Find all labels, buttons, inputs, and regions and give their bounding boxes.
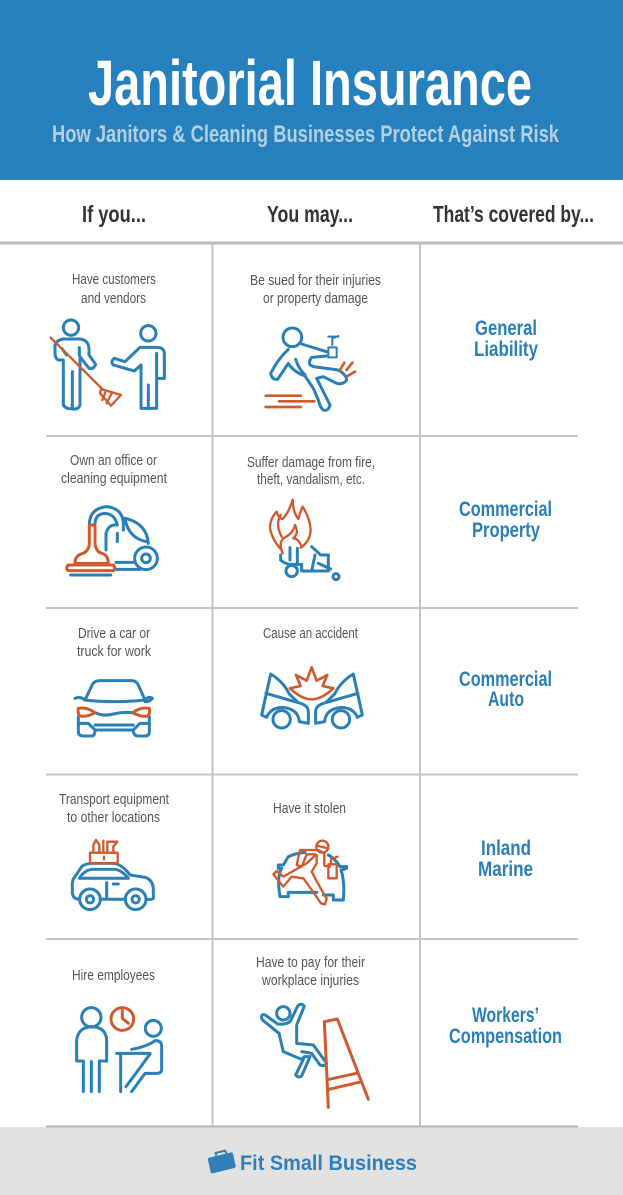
coverage: general liability: General (475, 317, 537, 340)
header banner (0, 0, 623, 180)
text: have it stolen: Have it stolen (273, 800, 346, 817)
text: have to pay: Have to pay for their (256, 954, 365, 971)
coverage: commercial property: Property (472, 519, 540, 542)
coverage: general liability (474, 317, 538, 361)
text: drive a car: Drive a car or (78, 625, 150, 642)
text: have customers: Have customers (72, 271, 156, 288)
coverage: general liability: Liability (474, 338, 538, 361)
text: have to pay (256, 954, 365, 989)
text: own an office: Own an office or (70, 452, 157, 469)
row 2: office or equipment (61, 452, 552, 580)
coverage: inland marine (478, 837, 533, 881)
icon: vacuum cleaner (67, 507, 157, 575)
text: have customers: and vendors (81, 290, 146, 307)
icon: janitor with broom and customer (51, 320, 164, 409)
icon: thief running past car (273, 841, 347, 904)
row 1: customers and vendors (51, 271, 538, 410)
coverage: workers compensation: Workers’ (472, 1004, 539, 1027)
icon: fire on cleaning cart (270, 500, 339, 580)
column headings (82, 201, 594, 227)
coverage: inland marine: Marine (478, 858, 533, 881)
row 4: transport equipment (59, 791, 533, 910)
text: drive a car (77, 625, 151, 660)
row 3: car (75, 625, 552, 736)
text: suffer damage (247, 454, 375, 488)
coverage: commercial property (459, 498, 552, 542)
icon: slipping person with spray bottle (266, 328, 355, 410)
icon: person falling from ladder (262, 1004, 368, 1107)
coverage: commercial auto: Auto (488, 688, 524, 711)
text: be sued: or property damage (263, 290, 368, 307)
text: cause an accident: Cause an accident (263, 625, 359, 642)
column headings: If you... (82, 201, 146, 227)
text: transport equipment: to other locations (67, 809, 160, 826)
text: hire employees: Hire employees (72, 967, 155, 984)
text: be sued (250, 272, 381, 307)
coverage: commercial property: Commercial (459, 498, 552, 521)
icon: briefcase (208, 1151, 236, 1173)
text: own an office (61, 452, 168, 487)
icon: employee, clock and seated worker (77, 1008, 162, 1092)
text: be sued: Be sued for their injuries (250, 272, 381, 289)
coverage: commercial auto (459, 668, 552, 711)
coverage: inland marine: Inland (481, 837, 531, 860)
text: suffer damage: theft, vandalism, etc. (257, 471, 365, 488)
text: have customers (72, 271, 156, 307)
coverage: workers compensation (449, 1004, 562, 1048)
column headings: You may... (267, 201, 353, 227)
icon: car front (75, 681, 152, 736)
coverage: commercial auto: Commercial (459, 668, 552, 691)
text: suffer damage: Suffer damage from fire, (247, 454, 375, 471)
text: drive a car: truck for work (77, 643, 151, 660)
row 5: employees (72, 954, 562, 1107)
icon: car with supplies on roof (72, 840, 153, 910)
icon: car crash (262, 667, 362, 728)
coverage: workers compensation: Compensation (449, 1025, 562, 1048)
text: transport equipment: Transport equipment (59, 791, 170, 808)
text: own an office: cleaning equipment (61, 470, 168, 487)
footer logo: Fit Small Business (240, 1151, 417, 1175)
footer band (0, 1127, 623, 1195)
text: transport equipment (59, 791, 170, 826)
text: have to pay: workplace injuries (261, 972, 359, 989)
